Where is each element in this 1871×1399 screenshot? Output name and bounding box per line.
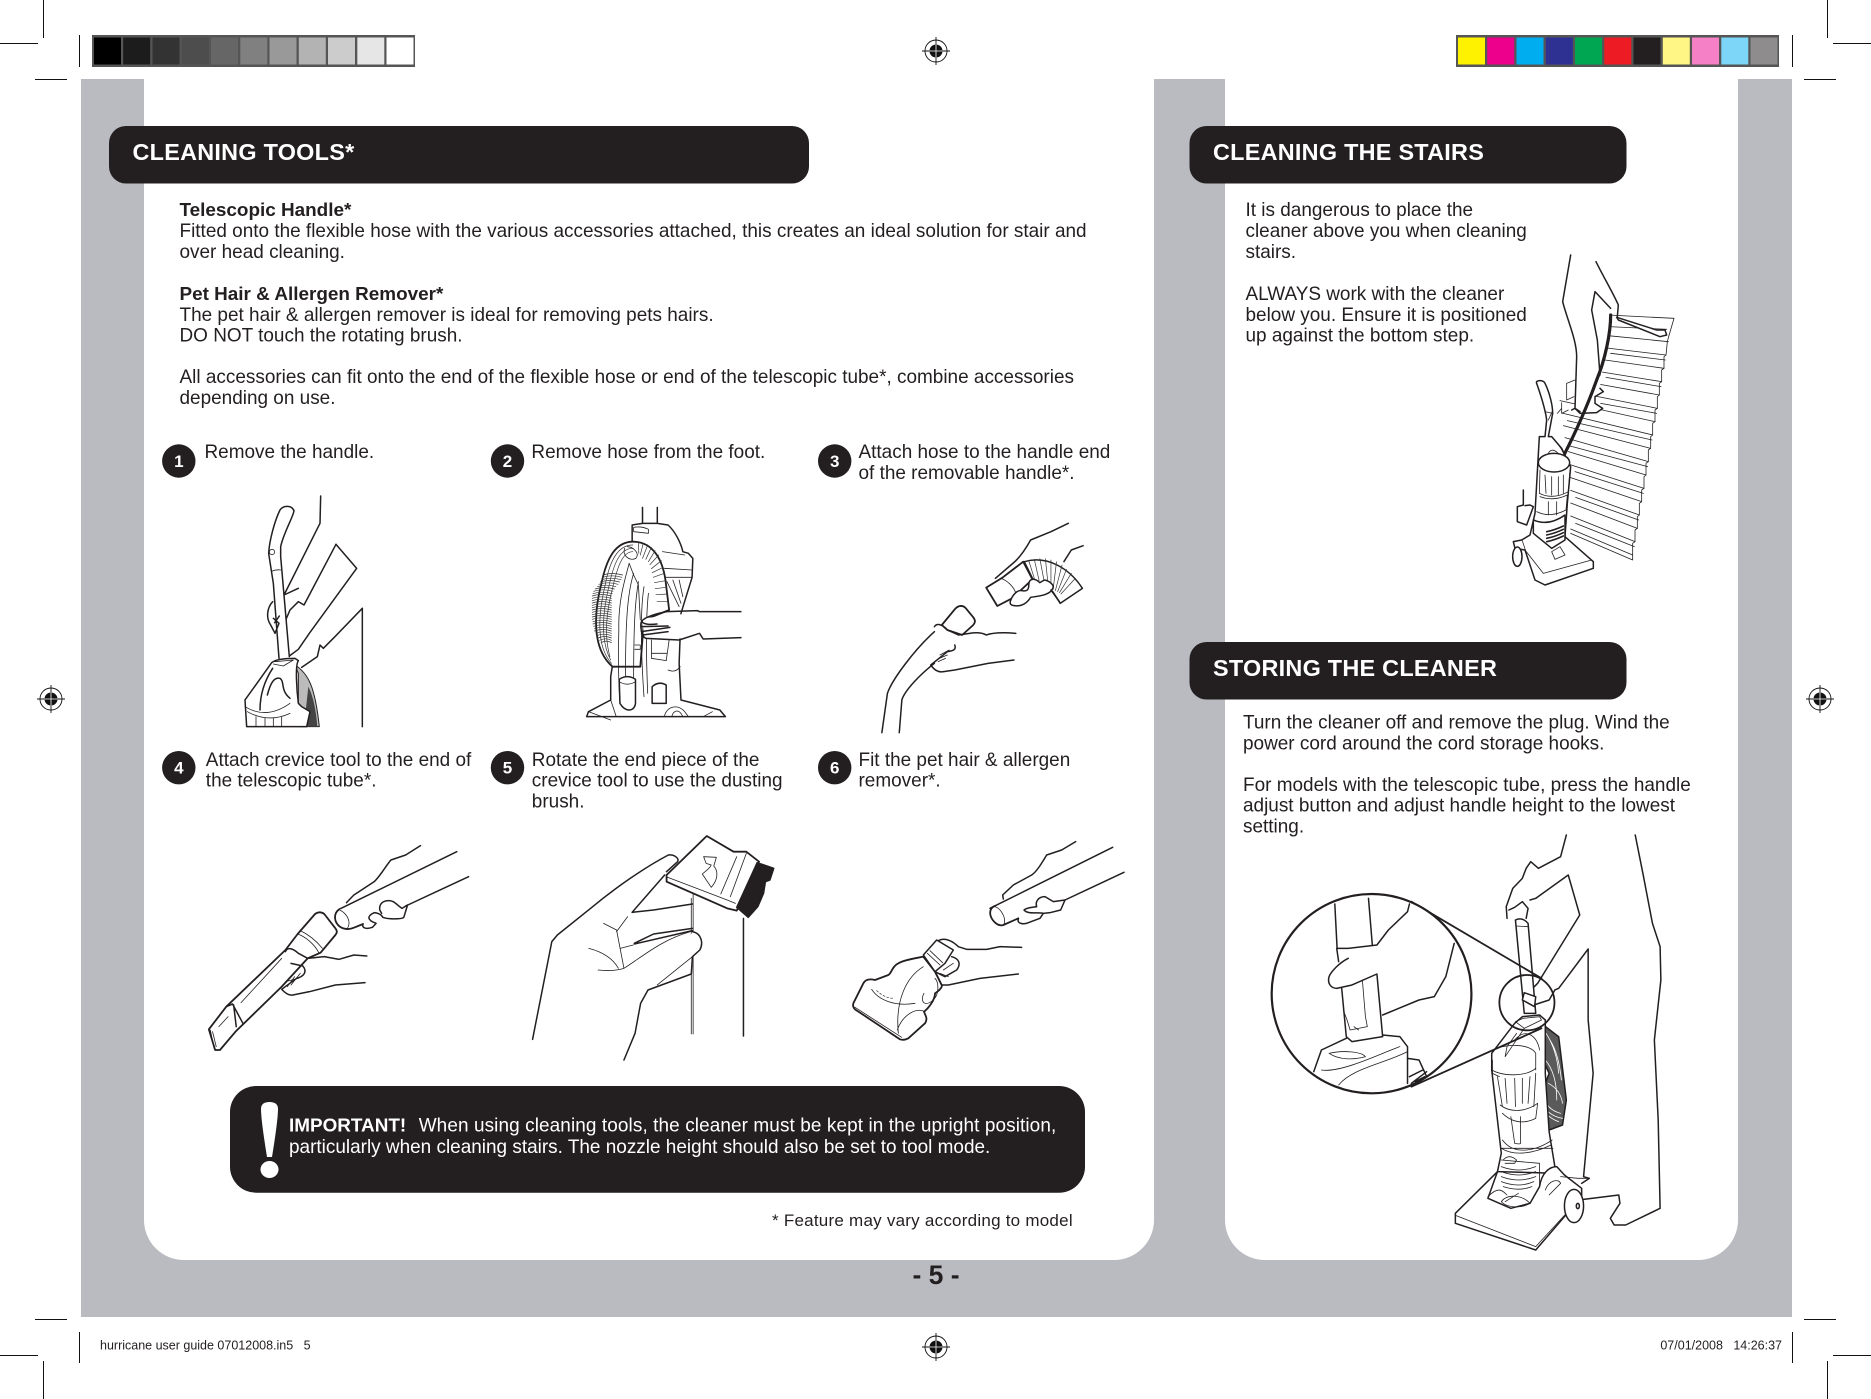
step 4: [162, 750, 472, 792]
text block: cleaning the stairs: cleaner above you when cleaning: [1246, 221, 1527, 242]
illustration: storing the cleaner, person: [1455, 835, 1661, 1250]
text block: storing the cleaner: Turn the cleaner off and remove the plug. Wind the: [1243, 712, 1670, 734]
step 3: Attach hose to the handle end: [858, 442, 1110, 463]
step 3: 3: [830, 452, 839, 471]
step 2: Remove hose from the foot.: [531, 442, 765, 463]
illustration: rotating the crevice tool end piece: [533, 855, 743, 1060]
text block: cleaning tools intro: Telescopic Handle*: [180, 200, 352, 221]
text block: cleaning the stairs: ALWAYS work with the cleaner: [1246, 284, 1504, 305]
text block: cleaning tools intro: DO NOT touch the rotating brush.: [180, 326, 463, 346]
text block: cleaning tools intro: over head cleaning.: [180, 242, 345, 263]
step 5: crevice tool to use the dusting: [532, 771, 783, 792]
text block: cleaning tools intro: All accessories can fit onto the end of the flexible hose or end of the telescopic tube*, combine accessories: [180, 367, 1074, 388]
illustration: cleaning the stairs: [1513, 255, 1674, 585]
panel: left white page: [144, 79, 1154, 1260]
callout: important notice: When using cleaning tools, the cleaner must be kept in the upright position,: [419, 1116, 1056, 1137]
heading: storing the cleaner: STORING THE CLEANER: [1213, 655, 1497, 681]
illustration: pet hair remover: [853, 842, 1124, 1040]
step 4: the telescopic tube*.: [206, 771, 377, 792]
greyscale colour bar: [92, 35, 415, 67]
text block: storing the cleaner: For models with the telescopic tube, press the handle: [1243, 775, 1691, 796]
illustration: dusting brush head: [667, 836, 774, 917]
panel: right white page: [1225, 79, 1738, 1260]
text block: storing the cleaner: adjust button and adjust handle height to the lowest: [1243, 796, 1676, 817]
text block: cleaning tools intro: depending on use.: [180, 388, 335, 409]
registration mark: bottom: [922, 1333, 950, 1361]
step 2: 2: [503, 452, 512, 471]
heading: cleaning the stairs: CLEANING THE STAIRS: [1213, 139, 1484, 165]
text block: cleaning tools intro: Pet Hair & Allergen Remover*: [180, 284, 444, 305]
step 1: [162, 442, 374, 478]
step 3: [818, 442, 1110, 484]
text block: storing the cleaner: setting.: [1243, 816, 1304, 838]
print slug: date and time: 07/01/2008 14:26:37: [1660, 1338, 1782, 1352]
registration mark: right: [1806, 685, 1834, 713]
step 5: 5: [503, 759, 512, 778]
text block: cleaning the stairs: up against the bottom step.: [1246, 326, 1474, 346]
step 4: Attach crevice tool to the end of: [206, 750, 472, 771]
illustration: zoom circle detail of handle adjust: [1272, 894, 1554, 1093]
text block: cleaning tools intro: [180, 200, 1087, 409]
heading: storing the cleaner: [1190, 642, 1626, 700]
text block: cleaning the stairs: [1246, 200, 1527, 346]
step 5: [491, 750, 783, 812]
process colour bar: [1456, 35, 1779, 67]
text block: storing the cleaner: [1243, 712, 1691, 838]
step 1: 1: [174, 452, 184, 471]
step 4: 4: [174, 759, 184, 778]
step 3: of the removable handle*.: [858, 463, 1074, 484]
print slug: file name: hurricane user guide 07012008.in5 5: [100, 1338, 311, 1352]
step 6: remover*.: [858, 771, 941, 792]
text block: cleaning the stairs: below you. Ensure it is positioned: [1246, 305, 1527, 326]
page number: - 5 -: [912, 1260, 960, 1290]
step 6: [818, 750, 1070, 792]
text block: cleaning tools intro: Fitted onto the flexible hose with the various accessories attached, this creates an ideal solution for stair and: [180, 221, 1087, 242]
step 6: Fit the pet hair & allergen: [858, 750, 1070, 771]
step 5: Rotate the end piece of the: [532, 750, 759, 771]
registration mark: left: [37, 685, 65, 713]
callout: important notice: particularly when cleaning stairs. The nozzle height should also be set to tool mode.: [289, 1137, 990, 1158]
heading: cleaning tools: [109, 126, 809, 184]
step 6: 6: [830, 759, 839, 778]
illustration: attaching the crevice tool: [209, 846, 469, 1050]
illustration: removing hose from the foot: [587, 507, 741, 720]
heading: cleaning tools: CLEANING TOOLS*: [132, 139, 355, 165]
callout: important notice: IMPORTANT!: [289, 1116, 406, 1137]
step 2: [491, 442, 765, 478]
illustration: removing the handle: [245, 496, 362, 727]
text block: storing the cleaner: power cord around the cord storage hooks.: [1243, 733, 1604, 754]
footnote: * Feature may vary according to model: [772, 1211, 1073, 1230]
text block: cleaning the stairs: It is dangerous to place the: [1246, 200, 1473, 221]
callout: important notice: [230, 1086, 1085, 1193]
step 1: Remove the handle.: [204, 442, 374, 463]
text block: cleaning the stairs: stairs.: [1246, 242, 1296, 263]
registration mark: top: [922, 37, 950, 65]
heading: cleaning the stairs: [1190, 126, 1626, 184]
step 5: brush.: [532, 792, 584, 812]
text block: cleaning tools intro: The pet hair & allergen remover is ideal for removing pets hairs.: [180, 305, 714, 326]
illustration: attaching the hose to the handle: [882, 523, 1083, 733]
